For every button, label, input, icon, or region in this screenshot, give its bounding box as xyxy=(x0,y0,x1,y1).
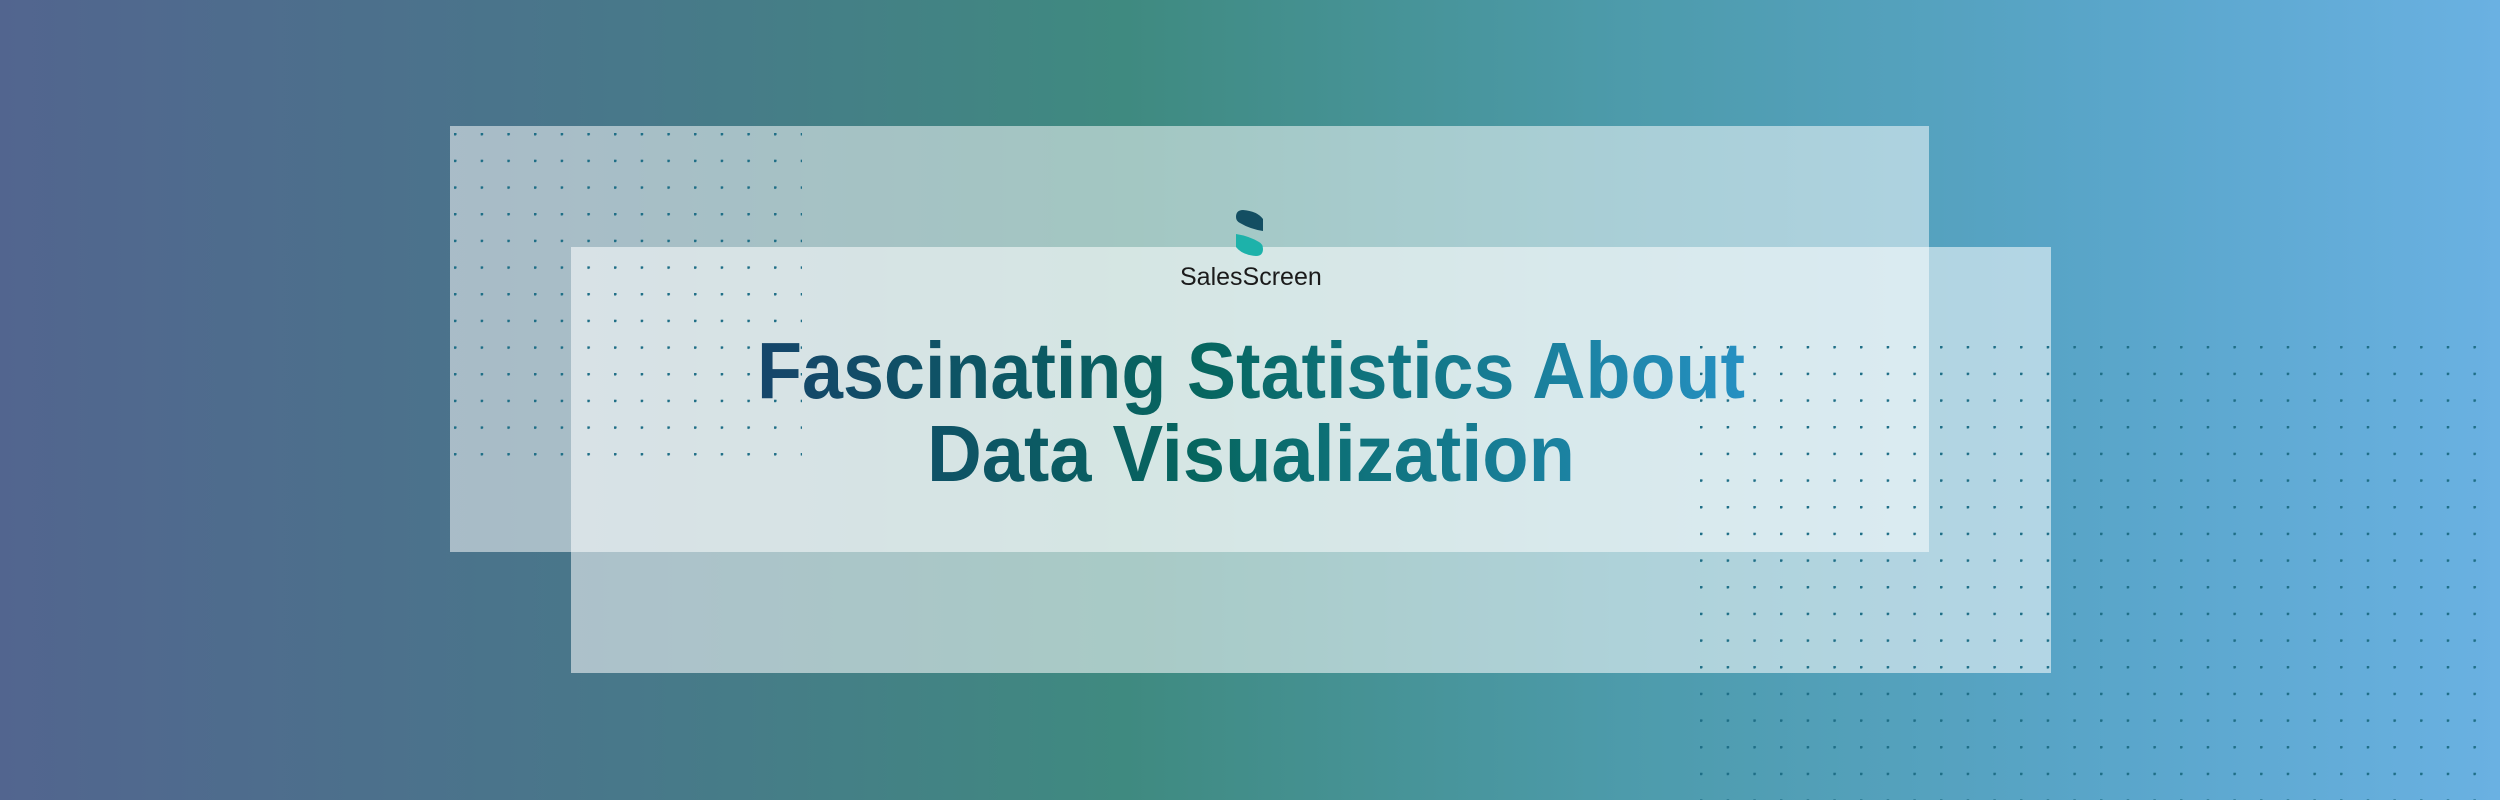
logo xyxy=(1180,210,1322,291)
icon: S mark xyxy=(1236,210,1263,256)
panel: front translucent rectangle xyxy=(571,247,2051,673)
title: Fascinating Statistics About xyxy=(757,326,1745,415)
title: Data Visualization xyxy=(927,409,1575,498)
brand name: SalesScreen xyxy=(1180,263,1322,291)
panel: back translucent rectangle xyxy=(450,126,1929,552)
